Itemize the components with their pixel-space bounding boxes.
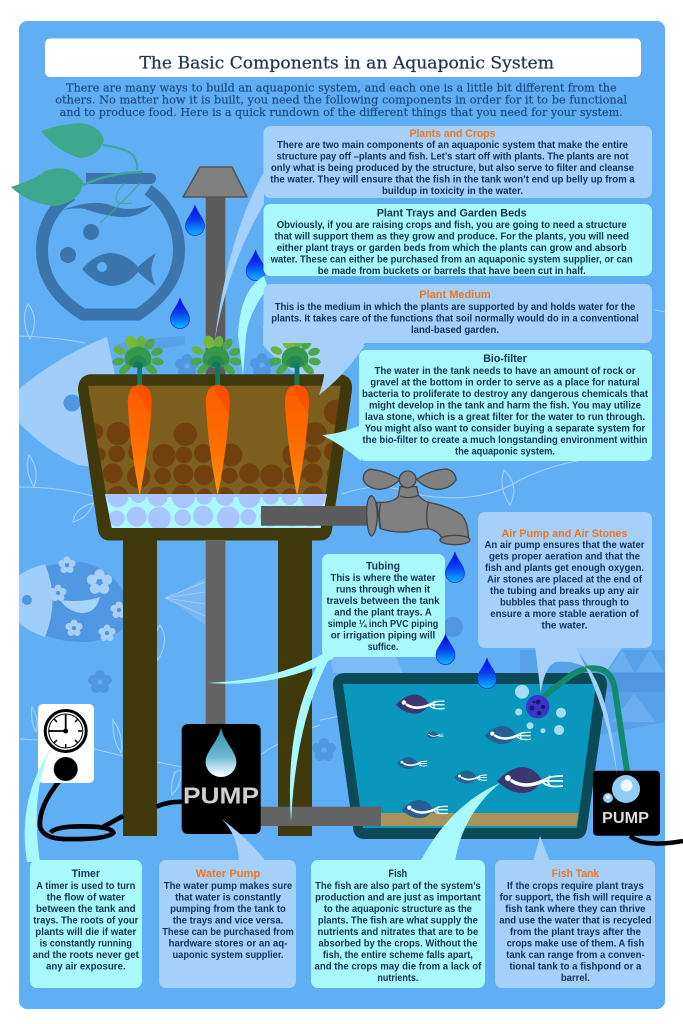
panel: timer: any air exposure. [46, 961, 126, 972]
panel: plants and crops: Plants and Crops [410, 128, 496, 140]
panel: fish: Fish [389, 868, 407, 880]
panel: fish: and the crops may die from a lack of [314, 961, 482, 972]
air pump: PUMP [602, 810, 649, 827]
panel: bio-filter: the bio-filter to create a much longstanding environment within [362, 435, 648, 446]
panel: fish: The fish are also part of the system’s [315, 881, 481, 892]
panel: plants and crops: only what is being produced by the structure, but also serve to filter and cleanse [271, 163, 634, 174]
panel: timer: Timer [72, 868, 101, 880]
panel: bio-filter [359, 350, 652, 461]
panel: air pump and air stones: fish and plants get enough oxygen. [485, 563, 644, 574]
panel: fish: fish, the entire scheme falls apart, [323, 950, 473, 961]
panel: bio-filter: the aquaponic system. [455, 446, 555, 457]
panel: tubing: suffice. [368, 642, 398, 653]
panel: plant trays and garden beds: water. These can either be purchased from an aquaponic system supplier, or can [270, 255, 633, 266]
panel: water pump: hardware stores or an aq- [168, 938, 288, 949]
panel: timer: A timer is used to turn [36, 881, 135, 892]
gravel [381, 813, 578, 826]
fish tank [333, 673, 607, 839]
panel: plant trays and garden beds: Plant Trays and Garden Beds [377, 208, 527, 220]
panel: fish tank: for support, the fish will require a [500, 892, 652, 903]
panel: water pump [159, 860, 296, 988]
panel: fish: production and are just as important [315, 892, 481, 903]
panel: fish tank: If the crops require plant trays [507, 881, 644, 892]
panel: tubing: and the plant trays. A [334, 607, 432, 618]
water pump: PUMP [183, 782, 259, 808]
panel: fish: plants. The fish are what supply the [318, 915, 478, 926]
water drops lower [478, 658, 496, 688]
icon: fishbowl with leaves [11, 123, 179, 314]
panel: plant medium: This is the medium in which the plants are supported by and holds water for the [275, 302, 636, 313]
panel: tubing: simple ¼ inch PVC piping [328, 619, 438, 630]
panel: water pump: uaponic system supplier. [172, 950, 284, 961]
panel: air pump and air stones: the water. [542, 621, 588, 632]
water outlet pipe [260, 807, 381, 826]
panel: tubing: runs through when it [336, 584, 431, 595]
panel: timer: the flow of water [47, 892, 125, 903]
panel: timer: trays. The roots of your [33, 915, 138, 926]
panel: timer [30, 860, 142, 988]
panel: timer: between the tank and [36, 904, 136, 915]
water layer [105, 494, 327, 528]
panel: fish [311, 860, 485, 988]
panel: bio-filter: lava stone, which is a great filter for the water to run through. [365, 412, 645, 423]
panel: plant medium: plants. It takes care of the functions that soil normally would do in a conventional [271, 314, 639, 324]
title banner: The Basic Components in an Aquaponic System [139, 53, 554, 73]
water drops upper [170, 205, 265, 328]
panel: water pump: The water pump makes sure [164, 881, 293, 892]
panel: plants and crops: There are two main components of an aquaponic system that make the entire [277, 140, 628, 151]
panel: bio-filter: You might also want to consider buying a separate system for [365, 423, 645, 434]
panel: air pump and air stones: An air pump ensures that the water [484, 540, 645, 551]
panel: fish: to the aquaponic structure as the [324, 904, 472, 915]
panel: water pump: the trays and vice versa. [173, 915, 284, 926]
panel: bio-filter: might develop in the tank and harm the fish. You may utilize [369, 400, 641, 411]
stones [94, 400, 339, 494]
panel: fish tank: tank can range from a conven- [506, 950, 645, 961]
panel: plants and crops: the water. They will ensure that the fish in the tank won’t end up belly up from a [270, 175, 635, 186]
air stone and bubbles [515, 685, 566, 735]
panel: bio-filter: The water in the tank needs to have an amount of rock or [374, 366, 636, 377]
panel: air pump and air stones: gets proper aeration and that the [489, 552, 640, 563]
fish [396, 694, 563, 818]
panel: fish tank: and use the water that is recycled [499, 915, 652, 926]
icon: faucet [363, 469, 470, 545]
panel: fish: absorbed by the crops. Without the [318, 938, 478, 949]
panel: tubing [322, 554, 445, 657]
water drops over tubing [436, 552, 464, 664]
panel: tubing: This is where the water [330, 573, 436, 584]
panel: plants and crops: buildup in toxicity in the water. [382, 186, 523, 197]
panel: air pump and air stones: Air Pump and Air Stones [502, 528, 628, 540]
plant tray legs [123, 538, 312, 836]
panel: timer: is constantly running [40, 938, 132, 949]
panel: fish tank: Fish Tank [552, 868, 600, 880]
panel: bio-filter: bacteria to proliferate to destroy any dangerous chemicals that [362, 389, 649, 400]
intro text [55, 82, 628, 119]
panel: plant medium: land-based garden. [411, 325, 499, 336]
intro text: There are many ways to build an aquaponic system, and each one is a little bit different from the [66, 82, 617, 94]
panel: plant medium: Plant Medium [419, 289, 491, 301]
panel: air pump and air stones [478, 512, 652, 648]
panel: water pump: These can be purchased from [162, 927, 294, 938]
water pump [182, 724, 261, 834]
water bubbles [105, 494, 327, 528]
timer [38, 704, 94, 783]
panel: fish: nutrients. [377, 973, 419, 984]
faucet pipe [261, 506, 369, 526]
panel: bio-filter: Bio-filter [483, 353, 527, 365]
panel: fish tank: barrel. [561, 973, 590, 984]
panel: plant trays and garden beds: Obviously, if you are raising crops and fish, you are going to need a structure [277, 220, 627, 231]
panel: plant trays and garden beds [264, 204, 652, 277]
panel: timer: and the roots never get [33, 950, 139, 961]
intro text: others. No matter how it is built, you need the following components in order for it to be functional [55, 94, 628, 107]
tower pipe and cap [183, 167, 247, 380]
air tube [543, 668, 627, 771]
panel: plant trays and garden beds: be made from buckets or barrels that have been cut in half. [318, 266, 586, 277]
panel: air pump and air stones: the tubing and breaks up any air [490, 586, 639, 597]
panel: fish tank: fish tank where they can thrive [505, 904, 646, 915]
panel: air pump and air stones: ensure a more stable aeration of [490, 609, 639, 620]
panel: bio-filter: gravel at the bottom in order to serve as a place for natural [370, 377, 640, 388]
panel: plant trays and garden beds: either plant trays or garden beds from which the plants can grow and absorb [277, 243, 627, 254]
title banner [45, 38, 641, 77]
panel: tubing: travels between the tank [326, 596, 440, 607]
panel: fish: nutrients and nitrates that are to be [318, 927, 479, 938]
panel: tubing: or irrigation piping will [331, 630, 435, 641]
panel: fish tank [495, 860, 655, 988]
carrots with leaves [112, 334, 321, 496]
timer power cord [40, 780, 183, 839]
panel: air pump and air stones: bubbles that pass through to [500, 598, 629, 609]
callout tails [25, 172, 617, 862]
panel: water pump: that water is constantly [175, 892, 281, 903]
panel: tubing: Tubing [366, 560, 400, 572]
panel: water pump: Water Pump [196, 868, 261, 880]
panel: fish tank: from the plant trays after the [510, 927, 641, 938]
intro text: and to produce food. Here is a quick rundown of the different things that you need for your system. [60, 106, 623, 119]
air pump [593, 771, 660, 836]
air pump cord [630, 836, 683, 844]
background decoration [19, 304, 665, 795]
panel: plants and crops: structure pay off –plants and fish. Let’s start off with plants. The plants are not [276, 152, 629, 163]
centre pipe [206, 541, 225, 726]
panel: fish tank: tional tank to a fishpond or a [509, 961, 642, 972]
panel: timer: plants will die if water [35, 927, 136, 938]
panel: water pump: pumping from the tank to [170, 904, 286, 915]
panel: plant medium [264, 284, 652, 343]
plant tray [78, 374, 352, 540]
panel: plant trays and garden beds: that will support them as they grow and produce. For the plants, you will need [274, 232, 629, 243]
panel: air pump and air stones: Air stones are placed at the end of [487, 575, 643, 586]
panel: fish tank: crops make use of them. A fish [507, 938, 644, 949]
panel: plants and crops [264, 126, 652, 198]
